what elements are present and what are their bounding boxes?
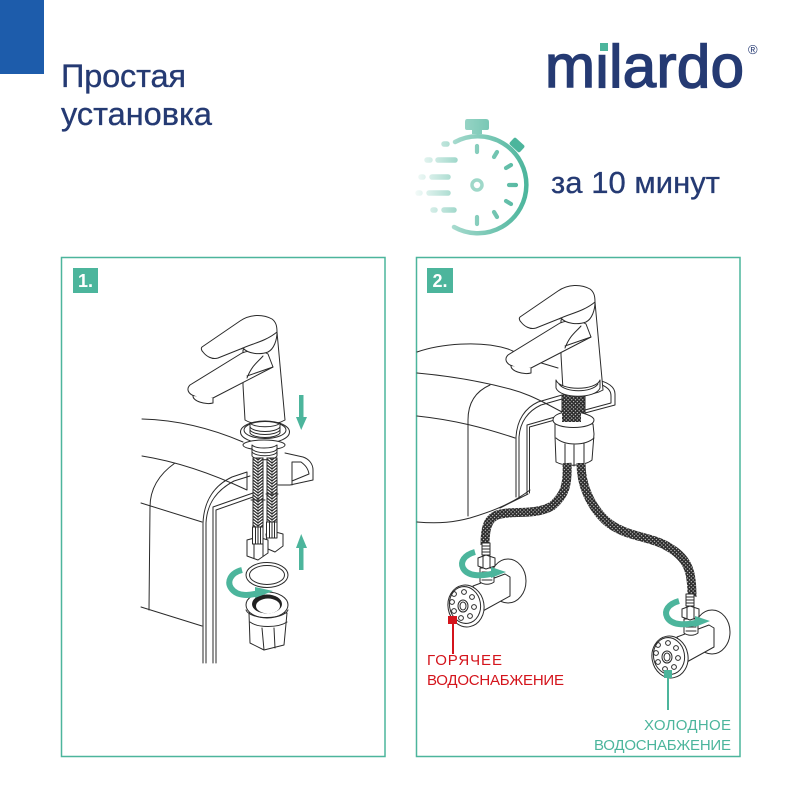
faucet: [506, 285, 603, 394]
logo: milardo: milardo: [545, 33, 744, 100]
panel: step 1: [62, 258, 385, 756]
cold water label: [594, 670, 731, 754]
step 1 badge: 1.: [78, 271, 93, 291]
logo teal square: [597, 41, 610, 52]
basin outline: [141, 419, 313, 663]
sealing ring: [246, 562, 288, 588]
hot water hose: [485, 463, 567, 545]
faucet: [188, 315, 285, 424]
cold water label: ХОЛОДНОЕ: [644, 717, 731, 734]
flange: [556, 380, 600, 396]
fixing nut: [246, 592, 288, 650]
arrow: down: [296, 395, 307, 430]
title: Простая: [61, 58, 186, 94]
panel: step 2: [416, 258, 740, 756]
title: [61, 58, 213, 132]
title: установка: [61, 96, 213, 132]
corner block: [0, 0, 44, 74]
braided hoses: [251, 458, 278, 528]
arrow: cold fitting rotation: [666, 601, 710, 627]
hot water label: [427, 616, 564, 689]
step 2 badge: 2.: [432, 271, 448, 291]
step 2 badge: [427, 268, 453, 293]
registered mark: ®: [748, 42, 758, 57]
cold water hose: [581, 463, 692, 597]
step 1 badge: [73, 268, 98, 293]
hose nuts: [247, 522, 283, 560]
cold valve: [649, 594, 730, 681]
cold water label: ВОДОСНАБЖЕНИЕ: [594, 737, 731, 754]
hot valve: [445, 543, 526, 630]
arrow: up: [296, 534, 307, 570]
basin outline: [417, 344, 615, 523]
hot water label: ГОРЯЧЕЕ: [427, 652, 502, 669]
duration label: за 10 минут: [551, 165, 720, 200]
mounting flange: [240, 421, 290, 460]
icon: stopwatch: [418, 119, 526, 233]
arrow: hot fitting rotation: [462, 552, 506, 578]
arrow: rotate nut: [229, 570, 273, 598]
threaded stem: [562, 395, 585, 425]
hot water label: ВОДОСНАБЖЕНИЕ: [427, 672, 564, 689]
fixing nut: [553, 412, 594, 466]
